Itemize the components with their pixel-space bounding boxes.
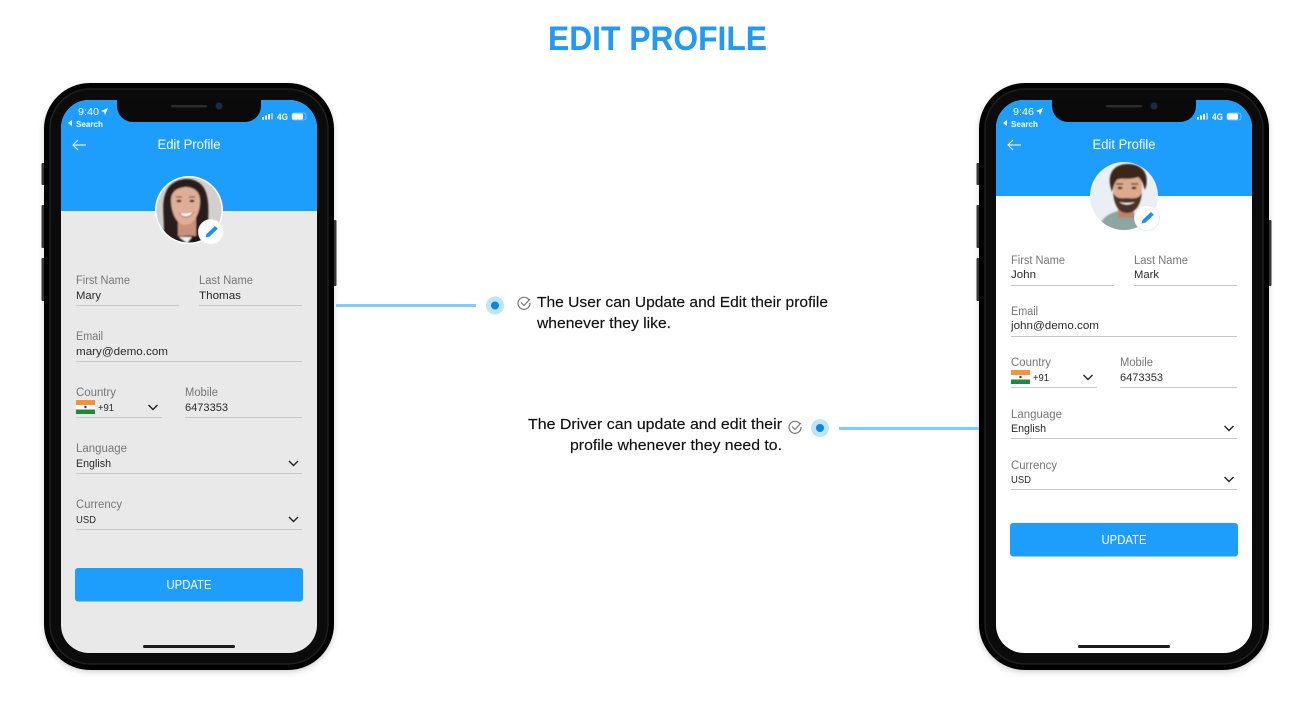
field: country: Country (76, 387, 116, 399)
field: currency (76, 499, 302, 530)
status bar: 4G (1212, 112, 1223, 122)
phone body (979, 83, 1269, 670)
screen title: Edit Profile (158, 137, 220, 152)
notch (117, 100, 261, 122)
phone body (44, 83, 334, 670)
status bar (68, 106, 306, 129)
field: language: English (1011, 423, 1046, 435)
phone: driver edit profile (976, 83, 1272, 670)
title: EDIT PROFILE (548, 20, 767, 58)
field: first name (1011, 255, 1114, 286)
field: language (1011, 409, 1237, 438)
icon: check (518, 297, 530, 309)
callout text: profile whenever they need to. (570, 437, 782, 454)
connector line (839, 427, 979, 430)
update button (75, 568, 303, 602)
phone side buttons (42, 163, 336, 301)
field: email: Email (1011, 306, 1038, 318)
back arrow (73, 140, 86, 150)
field: mobile: Mobile (1120, 357, 1153, 369)
bezel rim (985, 89, 1263, 664)
field: email: mary@demo.com (76, 346, 168, 358)
field: mobile: Mobile (185, 387, 218, 399)
field: language: English (76, 458, 111, 470)
callout: user (336, 294, 828, 332)
field: email: john@demo.com (1010, 320, 1099, 332)
field: last name: Last Name (1134, 255, 1188, 267)
avatar: woman (155, 176, 223, 246)
blue header (61, 100, 317, 211)
field: country (76, 387, 162, 418)
screen background (61, 100, 317, 653)
field: first name (76, 275, 179, 306)
field: last name (199, 275, 302, 306)
field: country: Country (1011, 357, 1051, 369)
blue header (996, 100, 1252, 196)
field: currency: USD (1011, 475, 1031, 486)
home indicator (1078, 645, 1170, 648)
update button: UPDATE (1102, 533, 1146, 547)
home indicator (143, 645, 235, 648)
field: email (76, 331, 302, 362)
bezel rim (50, 89, 328, 664)
update button: UPDATE (166, 578, 212, 592)
phone side buttons (976, 163, 1272, 301)
status bar: 9:40 (78, 106, 99, 118)
field: language: Language (76, 443, 127, 455)
field: mobile (1120, 357, 1237, 388)
field: first name: Mary (76, 290, 102, 302)
field: email: Email (76, 331, 103, 343)
form fields (1010, 255, 1237, 490)
field: mobile: 6473353 (1120, 372, 1163, 384)
status bar: Search (76, 120, 103, 129)
field: language: Language (1011, 409, 1062, 421)
avatar: man (1090, 162, 1158, 232)
field: country: +91 (98, 403, 114, 414)
screen background (996, 100, 1252, 653)
field: currency (1011, 460, 1237, 490)
field: mobile (185, 387, 302, 418)
field: currency: USD (76, 515, 96, 526)
callout text: The Driver can update and edit their (528, 416, 782, 433)
status bar: Search (1011, 120, 1038, 129)
status bar: 9:46 (1013, 106, 1034, 118)
field: first name: First Name (76, 275, 130, 287)
screen title: Edit Profile (1092, 137, 1156, 152)
back arrow (1008, 140, 1021, 150)
field: mobile: 6473353 (185, 402, 228, 414)
update button (1010, 523, 1238, 556)
icon: check (789, 421, 801, 433)
form fields (76, 275, 302, 530)
field: first name: John (1011, 269, 1036, 281)
field: currency: Currency (76, 499, 122, 511)
callout: driver (528, 416, 979, 454)
field: last name: Thomas (199, 290, 242, 302)
field: first name: First Name (1011, 255, 1065, 267)
callout text (536, 294, 828, 332)
callout text: whenever they like. (536, 315, 671, 332)
field: country (1011, 357, 1097, 388)
status bar (1003, 106, 1241, 129)
status bar: 4G (277, 112, 288, 122)
field: country: +91 (1033, 373, 1049, 384)
marker dot (811, 419, 829, 437)
callout text (528, 416, 782, 454)
field: email (1010, 306, 1237, 336)
marker dot (486, 296, 504, 314)
field: currency: Currency (1011, 460, 1057, 472)
field: last name (1134, 255, 1237, 286)
field: last name: Mark (1134, 269, 1160, 281)
field: language (76, 443, 302, 474)
callout text: The User can Update and Edit their profile (537, 294, 828, 311)
edit badge (198, 220, 224, 244)
connector line (336, 304, 476, 307)
field: last name: Last Name (199, 275, 253, 287)
edit badge (1134, 206, 1160, 230)
notch (1052, 100, 1196, 122)
phone: user edit profile (42, 83, 336, 670)
